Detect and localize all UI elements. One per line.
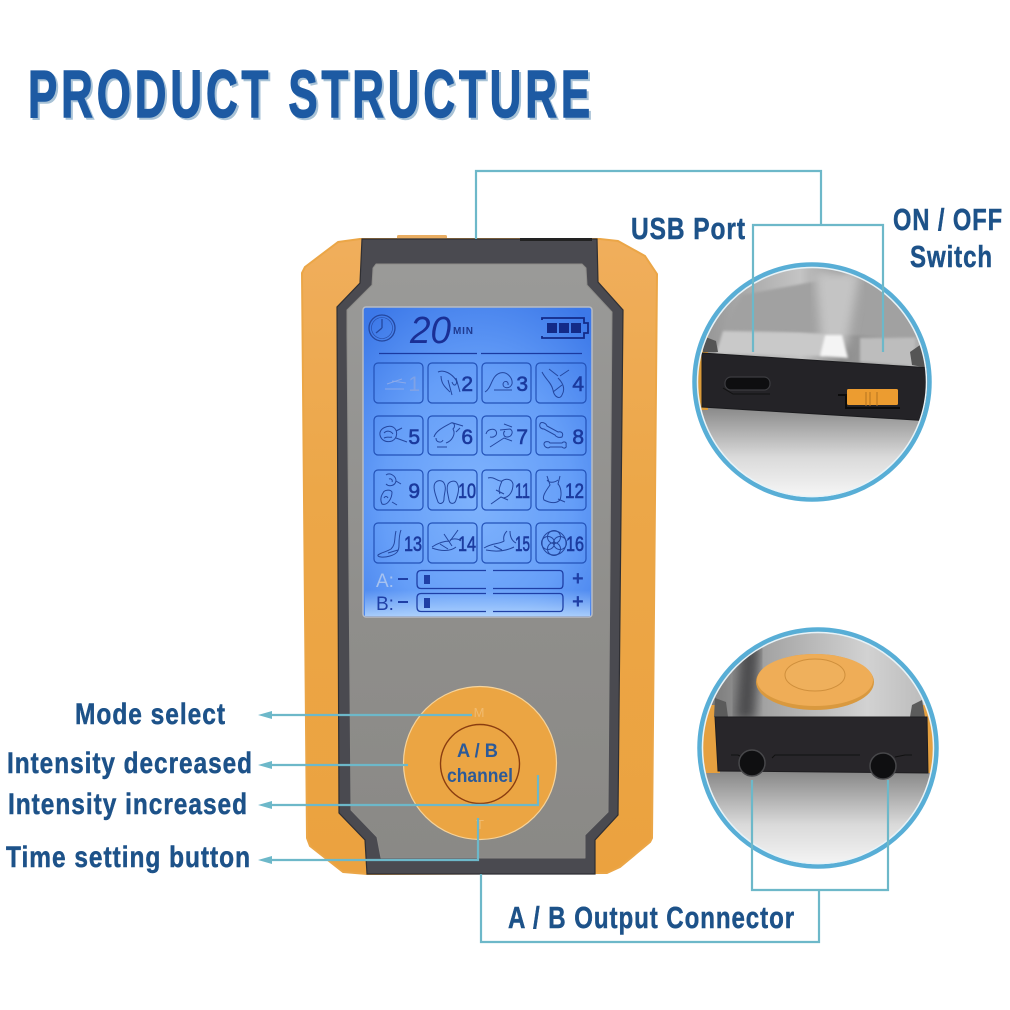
orange dial side view [756, 654, 874, 710]
tile 14 [428, 523, 477, 563]
channel B intensity bar: B: [376, 594, 394, 615]
dial mark T: T [476, 817, 484, 832]
dark side of device [715, 717, 928, 773]
tile 15 [482, 523, 531, 563]
tile 7: 7 [516, 426, 528, 449]
tile 12 [536, 470, 586, 510]
mode tiles [374, 363, 586, 563]
tile 13 [374, 523, 423, 563]
tile 11: 11 [515, 480, 530, 503]
bracket notches [714, 698, 925, 717]
tile 16 [536, 523, 586, 563]
tile 5: 5 [408, 426, 420, 449]
tile 10 [428, 470, 477, 510]
leader: USB and switch bracket [753, 225, 883, 352]
orange slide switch [838, 389, 900, 408]
left jack [739, 750, 765, 776]
tile 3: 3 [516, 373, 528, 396]
arrow: intensity decreased [258, 761, 408, 769]
channel A intensity bar: A: [376, 571, 394, 592]
label: Intensity decreased: Intensity decreased [7, 747, 253, 780]
title: PRODUCT STRUCTURE [28, 57, 594, 132]
device body [302, 235, 657, 874]
tile 13: 13 [404, 533, 422, 556]
timer value: 20 [409, 310, 451, 352]
label: USB Port: USB Port [631, 211, 746, 246]
label: ON / OFF Switch [893, 202, 1003, 274]
arrow: time setting [258, 818, 478, 864]
tile 11 [482, 470, 531, 510]
USB socket [723, 377, 770, 394]
orange casing [302, 239, 657, 874]
label: A / B Output Connector: A / B Output Connector [508, 900, 795, 935]
dark side of device [702, 353, 932, 421]
power switch on top edge [397, 235, 447, 240]
tile 4: 4 [572, 373, 584, 396]
USB recess on top edge [520, 238, 592, 241]
tile 1 [374, 363, 423, 403]
dark frame [337, 239, 623, 874]
tile 8: 8 [572, 426, 584, 449]
tile 1: 1 [408, 373, 420, 396]
tile 12: 12 [565, 480, 584, 503]
channel B intensity bar [376, 591, 584, 615]
orange casing edge [696, 335, 708, 410]
callout circle: USB port and power switch [690, 262, 935, 502]
orange casing edges [702, 705, 720, 773]
right jack [870, 753, 896, 779]
icon: clock [369, 315, 395, 341]
tile 10: 10 [458, 480, 476, 503]
leader: A/B connector bracket [752, 780, 888, 890]
arrow: intensity increased [258, 775, 538, 809]
bracket notches [703, 336, 928, 368]
leader: output connector box [481, 874, 819, 942]
leader: top of device to switch bracket [476, 171, 821, 239]
tile 14: 14 [458, 533, 476, 556]
dial mark M: M [474, 705, 484, 720]
icon: battery [542, 318, 588, 338]
tile 4 [536, 363, 586, 403]
channel A intensity bar: + [572, 568, 584, 590]
tile 2 [428, 363, 477, 403]
dial label channel: channel [447, 766, 513, 787]
label: Intensity increased: Intensity increased [8, 788, 248, 821]
dial label: A / B [457, 741, 498, 762]
channel A intensity bar [376, 568, 584, 592]
display rule [379, 352, 582, 354]
tile 9 [374, 470, 423, 510]
tile 6 [428, 416, 477, 455]
tile 7 [482, 416, 531, 455]
tile 16: 16 [566, 533, 584, 556]
grey face panel [347, 264, 612, 858]
tile 6: 6 [461, 426, 473, 449]
callout ring [700, 630, 936, 866]
tile 9: 9 [408, 480, 420, 503]
tile 3 [482, 363, 531, 403]
tile 2: 2 [461, 373, 473, 396]
LCD screen [363, 307, 592, 617]
callout circle: output connectors [695, 625, 941, 870]
label: Time setting button: Time setting button [6, 841, 251, 874]
tile 15: 15 [515, 533, 530, 556]
channel B intensity bar: + [572, 591, 584, 613]
tile 8 [536, 416, 586, 455]
label: Mode select: Mode select [75, 698, 226, 731]
timer unit: MIN [453, 326, 473, 337]
arrow: mode select [258, 711, 472, 719]
tile 5 [374, 416, 423, 455]
callout ring [694, 264, 930, 500]
control dial [404, 686, 556, 840]
